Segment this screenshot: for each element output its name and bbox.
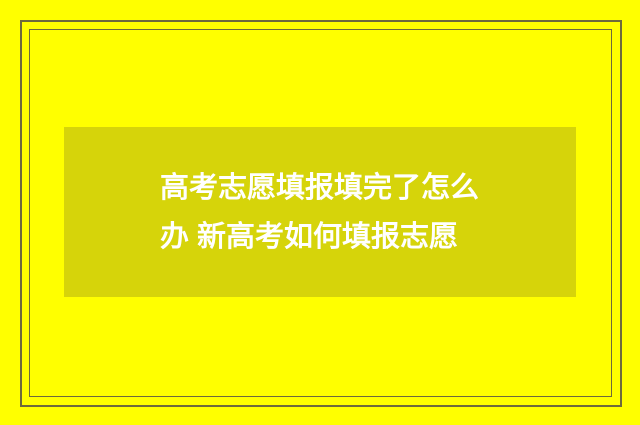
title text: 高考志愿填报填完了怎么 bbox=[160, 172, 479, 204]
title panel bbox=[64, 127, 576, 297]
inner frame border bbox=[29, 29, 612, 397]
title text: 办 新高考如何填报志愿 bbox=[160, 221, 458, 253]
title text bbox=[160, 172, 479, 253]
